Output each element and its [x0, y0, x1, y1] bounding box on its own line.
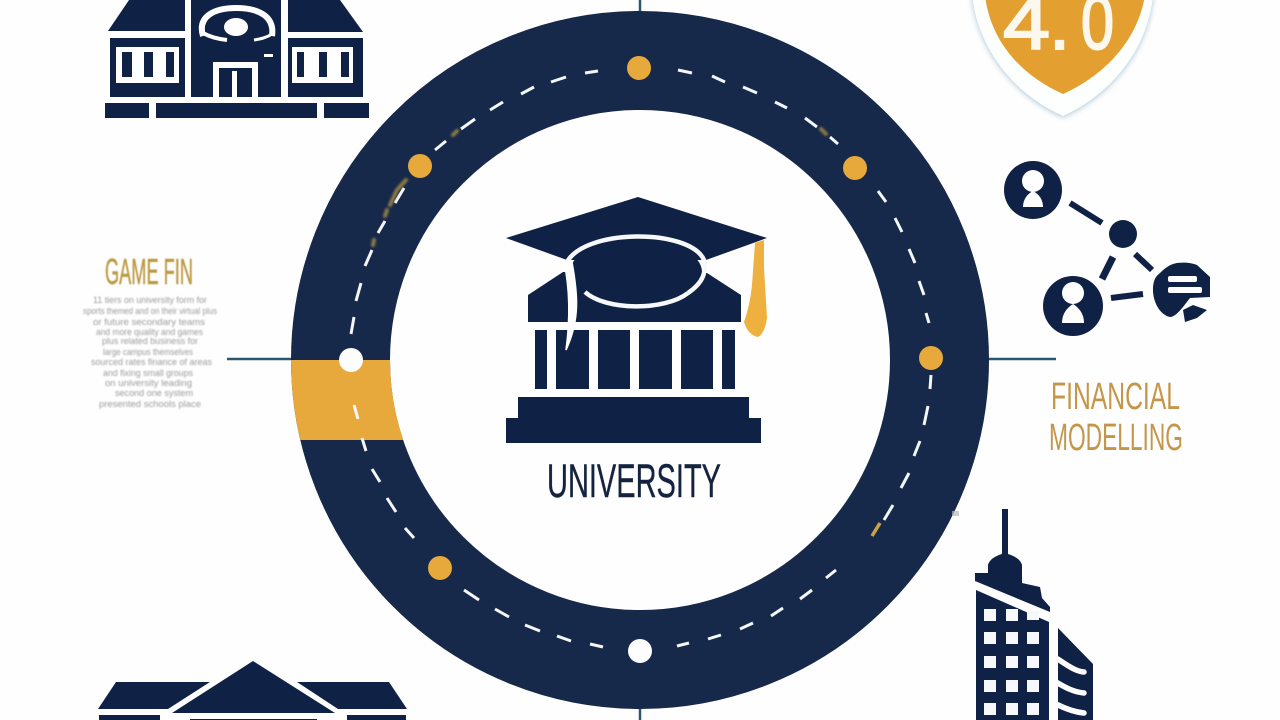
left body text: 11 tiers on university form for	[93, 295, 207, 306]
entrance door	[213, 62, 258, 97]
white beam gap	[585, 322, 735, 330]
gold ring segment	[291, 360, 403, 440]
label: financial modelling: MODELLING	[1049, 417, 1183, 459]
milestone dot: upper left	[408, 154, 432, 178]
icon: graduation cap on university building	[506, 197, 767, 443]
navy ring	[340, 60, 940, 660]
heading: university: UNIVERSITY	[547, 454, 721, 507]
chat bubble node	[1153, 263, 1210, 322]
central node	[1109, 220, 1137, 248]
icon: top-left campus building	[105, 0, 369, 118]
badge number	[1003, 0, 1114, 66]
icon: skyscraper	[975, 509, 1093, 720]
cap tassel	[744, 240, 767, 337]
building steps	[506, 397, 761, 443]
left body text: on university leading	[105, 378, 192, 389]
milestone dot: right	[919, 346, 943, 370]
icon: network of people	[1004, 161, 1210, 336]
icon: bottom-left campus building	[98, 661, 407, 720]
left heading: GAME FIN	[105, 251, 193, 292]
shield white border	[972, 0, 1153, 116]
left body text: plus related business for	[102, 336, 198, 347]
shield shadow	[972, 0, 1153, 117]
connector lines	[227, 0, 1056, 720]
central ring timeline	[291, 56, 943, 663]
wing stripes	[1056, 658, 1084, 713]
milestone dot: upper right	[843, 156, 867, 180]
building columns	[535, 330, 735, 389]
left body text: sourced rates finance of areas	[91, 357, 212, 368]
cap board	[506, 197, 767, 260]
left body text: large campus themselves	[103, 347, 193, 358]
tower windows	[984, 609, 1039, 715]
person node 2	[1043, 276, 1103, 336]
left windows	[116, 47, 179, 83]
left body text: or future secondary teams	[93, 317, 205, 328]
label: financial modelling	[1049, 376, 1183, 459]
icon: shield badge 4.0	[972, 0, 1153, 117]
shield gold fill	[985, 0, 1145, 94]
arch emblem	[202, 8, 273, 57]
milestone dot: bottom white	[628, 639, 652, 663]
left body text: and more quality and games	[96, 327, 203, 338]
network links	[1070, 203, 1152, 298]
label: financial modelling: FINANCIAL	[1051, 376, 1180, 418]
left body text: second one system	[115, 388, 193, 399]
left body text: sports themed and on their virtual plus	[83, 306, 217, 317]
milestone dot: lower left	[428, 556, 452, 580]
cap outline	[566, 236, 705, 293]
dashed path	[351, 70, 931, 647]
person node 1	[1004, 161, 1062, 219]
left body text: presented schools place	[99, 399, 201, 410]
gold dash lower right	[872, 523, 880, 536]
speck	[952, 511, 959, 516]
right windows	[292, 47, 353, 83]
cap body	[570, 239, 702, 305]
gold specks on the ring	[373, 129, 826, 245]
building roof	[528, 272, 741, 322]
milestone dot: left white	[339, 348, 363, 372]
left body text: and fixing small groups	[103, 368, 193, 379]
milestone dot: top	[627, 56, 651, 80]
left body text	[83, 295, 217, 410]
cap strap	[564, 262, 577, 350]
